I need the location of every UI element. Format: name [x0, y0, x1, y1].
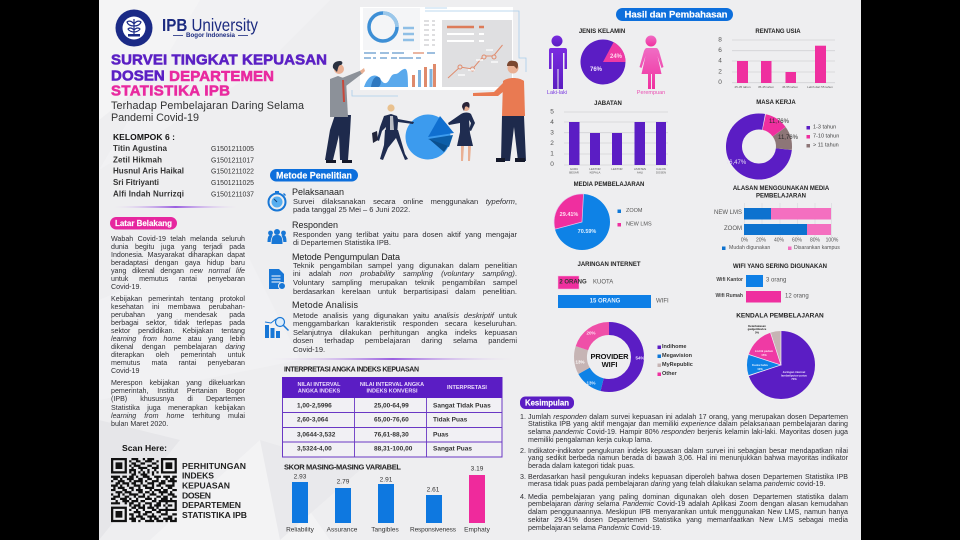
illustration: dashboard board — [352, 7, 526, 96]
heading: Kesimpulan: Kesimpulan — [525, 398, 569, 407]
conclusion item 2: Indikator-indikator pengukuran indeks kepuasan dalam survei ini sebagian besar mendapatkan nilai — [528, 446, 848, 454]
bar chart: variable scores: 2.93 — [294, 474, 307, 480]
text block: background paragraph 2: perubahan yang mendesak pada — [111, 311, 245, 319]
chart: learning obstacles pie: Listrik padam — [755, 349, 774, 353]
chart: wifi provider donut: Other — [662, 371, 678, 377]
text block: respondents: Responden yang terlibat yaitu para dosen aktif yang mengajar — [293, 230, 517, 239]
table: index interpretation: INTERPRETASI — [447, 385, 487, 391]
heading: Pelaksanaan: Pelaksanaan — [292, 187, 344, 197]
table: index interpretation: 3,5324-4,00 — [297, 446, 332, 452]
team list: G1501211005 — [211, 144, 254, 153]
bar chart: variable scores: Emphaty — [464, 526, 491, 534]
bar chart: variable scores: 2.91 — [380, 476, 393, 484]
bar chart: variable scores: 3.19 — [471, 466, 484, 472]
chart: years of service donut: 76,47% — [726, 160, 747, 166]
conclusion item 2: berada dalam kategori tidak puas. — [528, 462, 635, 470]
title: SURVEI TINGKAT KEPUASAN — [111, 52, 327, 68]
chart: position: ASISTEN — [634, 167, 646, 171]
title: DOSEN DEPARTEMEN — [111, 68, 274, 84]
conclusion item 3: merasa tidak puas pada pembelajaran daring yang telah dilakukan selama pandemic covid-19. — [528, 480, 825, 488]
table: index interpretation: 3,0644-3,532 — [297, 432, 336, 438]
chart: wifi provider donut: Megavision — [662, 353, 693, 359]
QR caption: INDEKS — [182, 471, 214, 481]
chart: reasons for using media: PEMBELAJARAN — [756, 194, 806, 200]
text block: data collection: ini adalah non probability sampling (voluntary sampling). — [293, 269, 517, 278]
bar chart: variable scores: Responsiveness — [410, 526, 457, 534]
table: index interpretation: Tidak Puas — [433, 416, 468, 424]
icon: stopwatch — [268, 191, 286, 210]
chart: learning obstacles pie: Keterbatasan — [748, 324, 766, 328]
bar chart: variable scores: Assurance — [327, 526, 358, 534]
chart: learning obstacles pie: Jaringan internet — [783, 370, 805, 374]
chart: learning media pie: 29.41% — [560, 212, 578, 218]
table: index interpretation: 65,00-76,60 — [374, 416, 409, 424]
table heading: INTERPRETASI ANGKA INDEKS KEPUASAN — [284, 366, 419, 374]
chart: gender: 76% — [590, 67, 603, 73]
text block: background paragraph 2: berbagai sektor, tidak terlepas pada — [111, 319, 245, 327]
chart: years of service donut: 1-3 tahun — [813, 125, 836, 131]
conclusion item 4: 4. — [520, 492, 526, 500]
chart: wifi provider donut: WIFI — [602, 360, 617, 369]
chart: position: 5 — [550, 108, 554, 116]
text block: background paragraph 3: learning from home terhitung mulai — [111, 412, 245, 420]
chart: age range: 6 — [718, 47, 722, 54]
chart: position: DOSEN — [656, 170, 666, 174]
text block: background paragraph 2 — [111, 295, 245, 375]
text block: background paragraph 1: Covid-19. — [111, 283, 141, 291]
table: index interpretation: Sangat Tidak Puas — [433, 402, 491, 410]
chart: age range — [718, 29, 835, 89]
conclusion item 4: sekitar 29.41% dosen Departemen Statistika yang memanfaatkan New LMS sebagai media — [528, 516, 848, 524]
text block: background paragraph 2: sektor pendidikan. Kebijakan tentang — [111, 327, 245, 335]
chart: learning obstacles pie: 10% — [757, 367, 763, 371]
title — [111, 52, 327, 100]
bar chart: variable scores: Reliability — [286, 526, 315, 534]
chart: gender: JENIS KELAMIN — [579, 29, 625, 35]
chart: wifi used: Wifi Rumah — [716, 293, 743, 299]
text block: background paragraph 1: untuk memutus rantai penyebaran — [111, 275, 245, 283]
icon: female figure — [640, 36, 664, 89]
chart: position: GURU — [570, 167, 578, 171]
QR code — [111, 459, 177, 521]
chart: position: JABATAN — [594, 101, 622, 107]
team list: G1501211025 — [211, 178, 254, 187]
text block: data collection — [293, 261, 517, 296]
conclusion item 1: 1. — [520, 412, 526, 420]
chart: age range: RENTANG USIA — [755, 29, 801, 35]
table: index interpretation: ANGKA INDEKS — [298, 388, 340, 394]
chart: reasons for using media: ALASAN MENGGUNAKAN MEDIA — [733, 186, 830, 192]
table: index interpretation — [282, 377, 502, 457]
text block: method execution — [293, 197, 517, 214]
text block: background paragraph 1: beradaptasi dengan gaya hidup baru — [111, 259, 245, 267]
icon: male figure — [549, 36, 567, 89]
heading: Metode Pengumpulan Data: Metode Pengumpulan Data — [292, 252, 400, 262]
chart: age range: 45-55 tahun — [782, 85, 798, 89]
text block: background paragraph 3: (IPB) khususnya di Departemen — [111, 395, 245, 403]
table: index interpretation: 88,31-100,00 — [374, 446, 413, 452]
team list — [113, 132, 254, 198]
chart: gender: 24% — [610, 54, 623, 60]
heading: Metode Analisis: Metode Analisis — [292, 300, 358, 310]
chart: learning media pie: MEDIA PEMBELAJARAN — [574, 182, 644, 188]
conclusion item 4 — [520, 492, 848, 532]
conclusion item 2: yang sedikit berbeda namun berada di bawah 3,06. Hal ini menunjukkan bahwa mayoritas indikator — [528, 454, 848, 462]
chart: reasons for using media: 80% — [810, 238, 821, 244]
text block: analysis method: Selanjutnya dilakukan perhitungan angka indeks kepuasan — [293, 328, 517, 337]
text block: background paragraph 3: Merespon kebijakan yang dikeluarkan — [111, 379, 245, 387]
chart: position: LEKTOR — [611, 167, 623, 171]
chart: position: KEPALA — [590, 170, 600, 174]
chart: position: 4 — [550, 119, 554, 126]
chart: internet network: JARINGAN INTERNET — [577, 262, 641, 268]
heading: Hasil dan Pembahasan: Hasil dan Pembahasan — [624, 10, 728, 20]
bar chart: variable scores: 2.61 — [427, 486, 440, 494]
chart: learning obstacles pie: 15% — [761, 353, 767, 357]
chart: reasons for using media: Mudah digunakan — [729, 245, 770, 251]
chart: reasons for using media: NEW LMS — [714, 210, 742, 216]
table: index interpretation: 76,61-88,30 — [374, 432, 409, 438]
logo wordmark: Bogor Indonesia — [186, 32, 235, 39]
chart: wifi provider donut: 54% — [635, 356, 645, 360]
subtitle: Terhadap Pembelajaran Daring Selama — [111, 100, 304, 112]
text block: background paragraph 2: Kebijakan pemerintah tentang protokol — [111, 295, 245, 303]
text block: respondents — [293, 230, 517, 247]
text block: background paragraph 3: bulan Maret 2020. — [111, 420, 168, 428]
title: STATISTIKA IPB — [111, 82, 230, 100]
bar chart: variable scores: Tangibles — [371, 526, 399, 534]
conclusion item 1: memiliki pengalaman kerja cukup lama. — [528, 436, 652, 444]
table: index interpretation: 2,60-3,064 — [297, 416, 328, 424]
chart: gender: Perempuan — [637, 90, 665, 96]
table: index interpretation: NILAI INTERVAL ANGKA — [360, 382, 424, 388]
chart: wifi used: 3 orang — [766, 278, 786, 284]
QR caption: KEPUASAN — [182, 480, 230, 490]
text block: background paragraph 1: dunia begitu juga yang terjadi pada — [111, 243, 245, 251]
text block: background paragraph 2: kesehatan ini membawa perubahan- — [111, 303, 245, 311]
chart heading: SKOR MASING-MASING VARIABEL — [284, 462, 401, 472]
chart: position: BESAR — [569, 170, 579, 174]
table: index interpretation: NILAI INTERVAL — [298, 382, 341, 388]
chart: wifi used: 12 orang — [785, 294, 809, 300]
chart: wifi used: Wifi Kantor — [716, 277, 743, 283]
chart: reasons for using media — [714, 186, 840, 251]
chart: internet network: 2 ORANG — [559, 280, 587, 286]
chart: reasons for using media: ZOOM — [724, 226, 742, 232]
chart: learning media pie: ZOOM — [626, 208, 643, 214]
chart: learning obstacles pie: Kuota habis — [752, 363, 768, 367]
chart: years of service donut: 11,76% — [769, 119, 790, 125]
text block: background paragraph 3: pemerintah, Institut Pertanian Bogor — [111, 387, 245, 395]
chart: age range: 4 — [718, 58, 722, 64]
table: index interpretation: INDEKS KONVERSI — [366, 388, 418, 394]
chart: learning media pie: 70.59% — [578, 229, 596, 235]
text block: analysis method: Covid-19. — [293, 345, 325, 354]
text block: analysis method: dosen terhadap pembelajaran daring selama pandemi — [293, 336, 517, 345]
chart: wifi used: WIFI YANG SERING DIGUNAKAN — [733, 264, 827, 270]
chart: wifi used — [716, 264, 827, 302]
chart: reasons for using media: 40% — [774, 238, 785, 244]
logo: IPB emblem — [116, 10, 152, 46]
bar chart: variable scores — [286, 466, 491, 534]
QR caption: STATISTIKA IPB — [182, 510, 247, 520]
text block: analysis method — [293, 311, 517, 354]
text block: analysis method: Metode analisis yang digunakan yaitu analisis deskriptif untuk — [293, 311, 517, 320]
heading: Latar Belakang — [110, 217, 177, 230]
text block: method execution: Survei dilaksanakan secara online menggunakan typeform, — [293, 197, 517, 206]
illustration: man in gray jacket — [325, 61, 365, 163]
text block: background paragraph 2: diterapkan oleh pemerintah untuk — [111, 351, 245, 359]
text block: method execution: pada tanggal 25 Mei – 6 Juni 2022. — [293, 205, 410, 214]
text block: background paragraph 1: Wabah Covid-19 telah melanda seluruh — [111, 235, 245, 243]
chart: position: 3 — [550, 130, 554, 136]
illustration: pie chart and two small figures — [372, 102, 475, 161]
text block: data collection: berdasarkan kerelaan untuk berpartisipasi dalam penelitian. — [293, 287, 517, 296]
bar chart: variable scores: 2.79 — [337, 478, 350, 486]
chart: position: 0 — [550, 161, 554, 168]
QR caption: PERHITUNGAN — [182, 461, 246, 471]
conclusion item 4: Media pembelajaran yang paling dominan digunakan oleh dosen Departemen statistika dalam — [528, 492, 848, 500]
chart: age range: Lebih dari 55 tahun — [807, 85, 833, 89]
chart: wifi provider donut: 13% — [586, 380, 596, 386]
text block: analysis method: menggambarkan karakteristik responden secara keseluruhan. — [293, 319, 517, 328]
chart: years of service donut: 7-10 tahun — [813, 134, 839, 140]
subtitle: Pandemi Covid-19 — [111, 112, 199, 124]
chart: wifi provider donut: PROVIDER — [590, 352, 629, 361]
text block: background paragraph 1 — [111, 235, 245, 291]
chart: internet network: KUOTA — [593, 280, 613, 286]
text block: background paragraph 2: dikenal dengan pembelajaran daring — [111, 343, 245, 351]
chart: reasons for using media: Disarankan kampus — [794, 245, 840, 251]
chart: age range: 0 — [718, 79, 722, 86]
chart: position: 2 — [550, 140, 554, 147]
table: index interpretation: 1,00-2,5996 — [297, 402, 332, 410]
chart: wifi provider donut: 20% — [586, 330, 596, 336]
text block: data collection: Voluntary sampling merupakan teknik pengambilan sampel — [293, 278, 517, 287]
conclusion item 1 — [520, 412, 848, 444]
conclusion item 1: Jumlah responden dalam survei kepuasan ini adalah 17 orang, yang merupakan dosen Departemen — [528, 412, 848, 420]
QR caption — [182, 461, 247, 520]
chart: position: AHLI — [637, 170, 643, 174]
chart: reasons for using media: 60% — [792, 238, 803, 244]
icon: magnifier chart — [265, 318, 288, 338]
team list: Husnul Aris Haikal — [113, 166, 184, 176]
QR caption: DOSEN — [182, 490, 211, 500]
table: index interpretation: 25,00-64,99 — [374, 402, 409, 410]
table: index interpretation: Puas — [433, 432, 449, 438]
chart: years of service donut — [724, 100, 839, 181]
chart: learning obstacles pie — [736, 312, 824, 386]
subtitle — [111, 100, 304, 124]
team list: Titin Agustina — [113, 144, 168, 153]
chart: years of service donut: MASA KERJA — [756, 100, 796, 106]
team list: KELOMPOK 6 : — [113, 132, 175, 142]
text block: background paragraph 2: memutus mata rantai penyebaran — [111, 359, 245, 367]
text block: background paragraph 2: learning from home atau yang lebih — [111, 335, 245, 343]
team list: Zetil Hikmah — [113, 156, 162, 164]
conclusion item 2: 2. — [520, 446, 526, 454]
scan here label: Scan Here: — [122, 443, 167, 453]
heading: Latar Belakang: Latar Belakang — [115, 219, 172, 228]
chart: learning obstacles pie: 5% — [755, 330, 760, 334]
chart: gender: Laki-laki — [547, 90, 567, 96]
team list: Alfi Indah Nurrizqi — [113, 190, 184, 198]
chart: age range: 35-45 tahun — [758, 85, 774, 89]
chart: reasons for using media: 20% — [756, 238, 767, 244]
chart: years of service donut: 11,76% — [778, 135, 799, 141]
chart: position: 1 — [550, 150, 554, 158]
heading: Responden: Responden — [292, 220, 338, 230]
team list: G1501211037 — [211, 190, 254, 198]
chart: position — [550, 101, 668, 174]
conclusion item 2 — [520, 446, 848, 470]
chart: gender — [547, 29, 665, 96]
chart: internet network: 15 ORANG — [590, 299, 621, 305]
chart: wifi provider donut: MyRepublic — [662, 362, 693, 368]
team list: Sri Fitriyanti — [113, 178, 159, 187]
text block: data collection: Teknik pengambilan sampel yang digunakan dalam penelitian — [293, 261, 517, 270]
conclusion item 4: dalam penggunaannya. Meskipun IPB menyarankan untuk menggunakan New LMS, namun hanya — [528, 508, 848, 516]
conclusion item 3 — [520, 472, 848, 488]
chart: reasons for using media: 0% — [741, 238, 749, 244]
conclusion item 1: Statistika IPB yang aktif mengajar dan memiliki experience dalam pelaksanaan pembelajaran daring — [528, 420, 848, 428]
heading: Metode Penelitian: Metode Penelitian — [276, 170, 352, 180]
text block: background paragraph 2: Covid-19 — [111, 367, 139, 375]
chart: internet network — [558, 262, 669, 308]
conclusion item 4: pembelajaran selama Pandemic Covid-19. — [528, 524, 662, 532]
illustration: man in orange shirt — [473, 61, 526, 162]
conclusion item 3: 3. — [520, 472, 526, 480]
icon: people group — [268, 229, 286, 244]
text block: background paragraph 1: yang dikenal dengan new normal life — [111, 267, 245, 275]
team list: G1501211017 — [211, 156, 254, 164]
chart: learning obstacles pie: 70% — [791, 377, 797, 381]
team list: G1501211022 — [211, 166, 254, 176]
conclusion item 3: Berdasarkan hasil pengukuran indeks kepuasan diperoleh bahwa dosen Departemen Statistika IPB — [528, 472, 848, 480]
table: index interpretation: Sangat Puas — [433, 446, 472, 452]
chart: years of service donut: > 11 tahun — [813, 143, 839, 149]
chart: age range: 2 — [718, 68, 722, 76]
chart: learning obstacles pie: KENDALA PEMBELAJARAN — [736, 312, 824, 320]
text block: respondents: di Departemen Statistika IPB. — [293, 238, 391, 247]
chart: learning media pie: NEW LMS — [626, 222, 652, 228]
text block: background paragraph 1: Indonesia. Masyarakat diharapkan dapat — [111, 251, 245, 259]
chart: internet network: WIFI — [656, 299, 669, 305]
chart: reasons for using media: 100% — [826, 238, 839, 244]
heading: Kesimpulan — [520, 396, 574, 409]
conclusion item 1: selama pandemic Covid-19. Hampir 80% responden berjenis kelamin laki-laki. Mayoritas dosen juga — [528, 428, 848, 436]
logo wordmark: IPB University — [162, 15, 258, 35]
chart: wifi provider donut: 13% — [575, 360, 585, 364]
chart: age range: 25-35 tahun — [734, 85, 751, 89]
chart: age range: 8 — [718, 36, 722, 44]
QR caption: DEPARTEMEN — [182, 500, 241, 510]
chart: wifi provider donut: Indihome — [662, 344, 686, 350]
chart: wifi provider donut — [570, 318, 693, 396]
text block: background paragraph 3 — [111, 379, 245, 428]
chart: position: CALON — [656, 167, 666, 171]
text block: background paragraph 3: Statistika juga menerapkan kebijakan — [111, 404, 245, 412]
chart: learning obstacles pie: lambat/putus-putus — [781, 374, 807, 378]
chart: learning obstacles pie: gadget/device — [748, 327, 767, 331]
icon: document — [269, 269, 286, 290]
chart: position: LEKTOR — [589, 167, 601, 171]
heading: Metode Penelitian — [270, 169, 358, 182]
poster background — [99, 0, 861, 540]
chart: learning media pie — [554, 182, 652, 250]
conclusion item 4: pembelajaran daring selama Pandemic Covid-19 adalah Aplikasi Zoom dengan alasan kemudahan — [528, 500, 848, 508]
